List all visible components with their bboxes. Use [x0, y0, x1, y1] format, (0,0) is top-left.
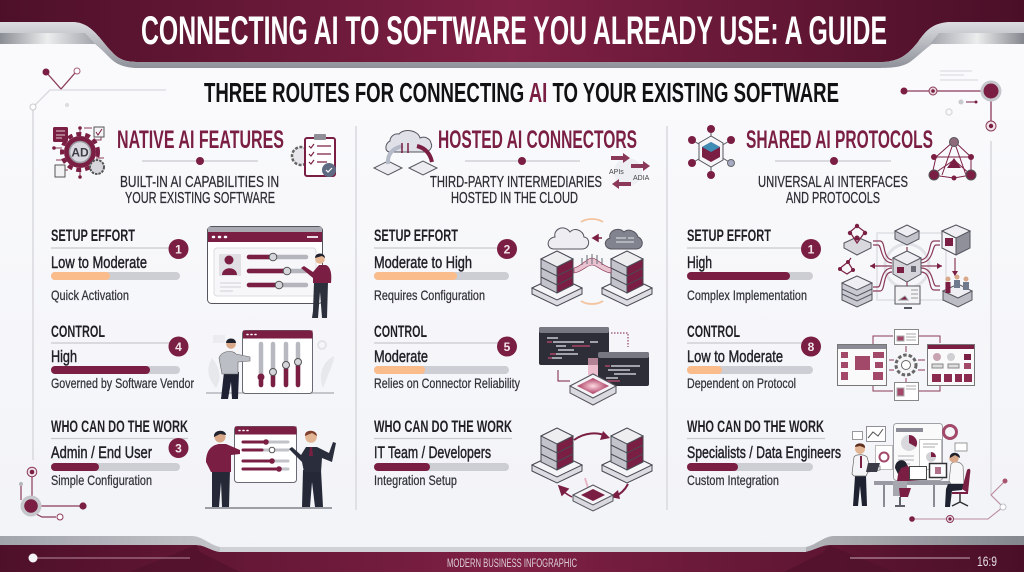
row: who can do the work: Integration Setup	[374, 472, 457, 488]
description: YOUR EXISTING SOFTWARE	[125, 190, 275, 207]
illustration: clouds and bridged servers	[532, 219, 652, 306]
row: who can do the work: Simple Configuration	[51, 472, 152, 488]
row: setup effort: SETUP EFFORT	[51, 226, 135, 245]
row: who can do the work: Admin / End User	[51, 443, 152, 462]
row: who can do the work: Custom Integration	[687, 472, 779, 488]
row: setup effort: SETUP EFFORT	[687, 226, 771, 245]
description: HOSTED IN THE CLOUD	[451, 190, 578, 207]
panel: native AI features	[51, 126, 336, 508]
row: control: CONTROL	[687, 322, 740, 341]
decoration: top-right circuit	[900, 71, 1002, 131]
description: UNIVERSAL AI INTERFACES	[758, 174, 908, 191]
row: setup effort: 1	[175, 242, 182, 256]
illustration: code windows and chip	[539, 327, 649, 405]
row: who can do the work	[687, 417, 841, 488]
row: control: Moderate	[374, 347, 428, 366]
row: setup effort: SETUP EFFORT	[374, 226, 458, 245]
row: who can do the work	[374, 417, 512, 488]
row: control: 8	[808, 340, 815, 354]
heading divider	[142, 157, 258, 165]
row: control	[51, 322, 194, 391]
description: AND PROTOCOLS	[786, 190, 880, 207]
illustration: servers with circular arrows	[532, 428, 652, 511]
row: who can do the work: WHO CAN DO THE WORK	[687, 417, 824, 436]
row: setup effort: Moderate to High	[374, 253, 472, 272]
footer rule right	[850, 557, 970, 559]
heading: HOSTED AI CONNECTORS	[438, 126, 637, 154]
row: who can do the work: WHO CAN DO THE WORK	[51, 417, 188, 436]
icon: AI gear with nodes	[52, 126, 104, 179]
icon: API arrows	[609, 153, 650, 189]
row: control: Governed by Software Vendor	[51, 375, 194, 391]
icon: API arrows: APIs	[609, 169, 624, 176]
icon: API arrows: ADIA	[633, 175, 650, 182]
panel: hosted AI connectors	[374, 126, 652, 511]
row: control: Dependent on Protocol	[687, 375, 796, 391]
icon: checklist clipboard with gears	[292, 134, 336, 177]
footer label: MODERN BUSINESS INFOGRAPHIC	[447, 558, 577, 570]
illustration: two people at settings board	[205, 426, 336, 508]
row: control: High	[51, 347, 77, 366]
row: who can do the work: IT Team / Developers	[374, 443, 491, 462]
row: setup effort	[374, 226, 517, 303]
heading: NATIVE AI FEATURES	[117, 126, 284, 154]
heading divider	[775, 157, 891, 165]
illustration: team at desk with dashboards	[852, 424, 970, 507]
description	[120, 174, 279, 207]
row: setup effort: Low to Moderate	[51, 253, 147, 272]
decoration: bottom-right circuit	[909, 478, 1008, 522]
icon: AI gear with nodes: AD	[71, 146, 89, 160]
row: setup effort: Complex Implementation	[687, 287, 807, 303]
row: setup effort	[687, 226, 821, 303]
row: setup effort: Requires Configuration	[374, 287, 485, 303]
icon: cloud with arcs between platforms	[374, 131, 437, 175]
icon: hexagon network	[688, 125, 735, 179]
row: control	[374, 322, 520, 391]
illustration: settings window with person	[208, 226, 331, 318]
row: setup effort: 2	[504, 242, 511, 256]
row: setup effort: 1	[808, 242, 815, 256]
illustration: vertical sliders with person	[206, 330, 334, 399]
row: who can do the work	[51, 417, 188, 488]
illustration: dashboards around gear	[838, 330, 974, 400]
row: control: 4	[175, 340, 182, 354]
illustration: connected systems hub	[838, 224, 972, 308]
footer ratio label: 16:9	[977, 554, 997, 569]
footer band	[0, 536, 1024, 572]
row: control: CONTROL	[374, 322, 427, 341]
heading divider	[465, 157, 580, 165]
description	[758, 174, 908, 207]
row: control: CONTROL	[51, 322, 105, 341]
description: BUILT-IN AI CAPABILITIES IN	[120, 174, 279, 191]
row: who can do the work: Specialists / Data Engineers	[687, 443, 841, 462]
decoration: bottom-left circuit	[19, 467, 87, 520]
header band	[0, 0, 1024, 68]
row: setup effort: Quick Activation	[51, 287, 129, 303]
icon: triangular network	[929, 138, 976, 180]
row: setup effort: High	[687, 253, 712, 272]
row: who can do the work: 3	[175, 442, 182, 456]
row: control	[687, 322, 821, 391]
row: control: Relies on Connector Reliability	[374, 375, 520, 391]
decoration: top-left circuit	[30, 68, 166, 110]
row: setup effort	[51, 226, 188, 303]
footer slider left	[28, 554, 190, 562]
panel: shared AI protocols	[687, 125, 976, 507]
description	[430, 174, 602, 207]
row: control: 5	[504, 340, 511, 354]
row: control: Low to Moderate	[687, 347, 783, 366]
column dividers	[33, 107, 991, 510]
row: who can do the work: WHO CAN DO THE WORK	[374, 417, 512, 436]
subtitle: THREE ROUTES FOR CONNECTING AI TO YOUR EXISTING SOFTWARE	[204, 77, 839, 108]
description: THIRD-PARTY INTERMEDIARIES	[430, 174, 602, 191]
